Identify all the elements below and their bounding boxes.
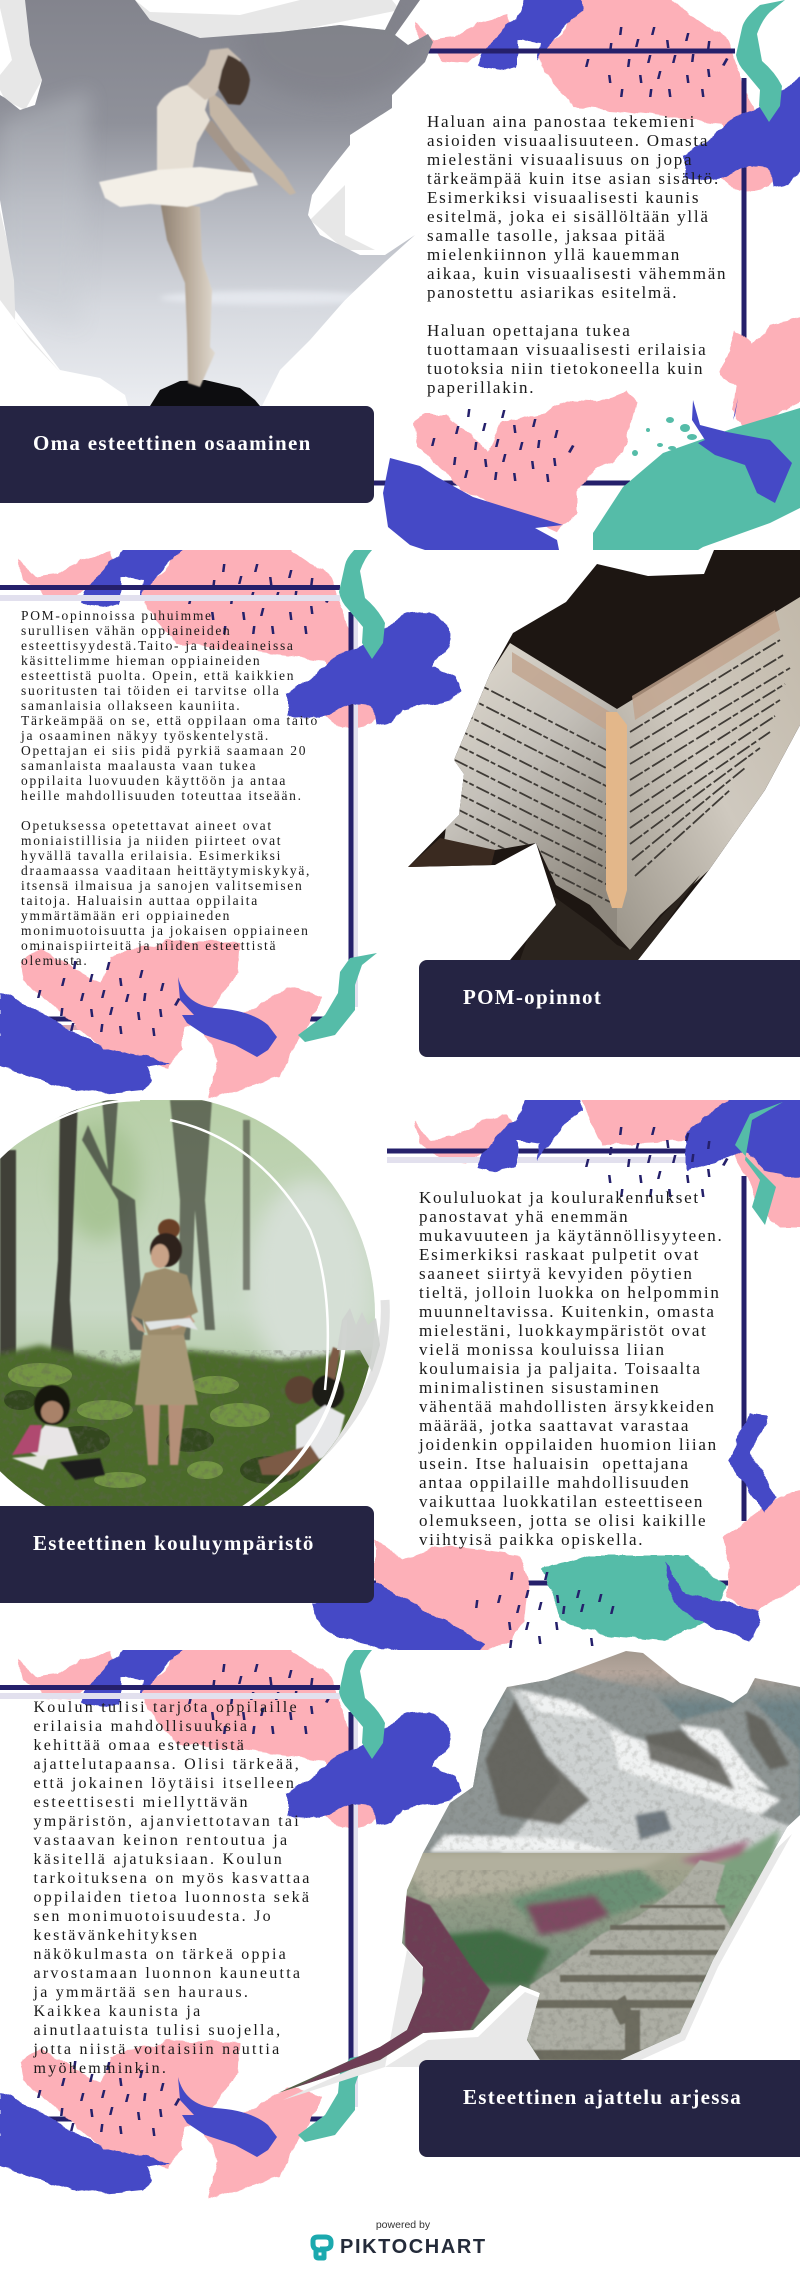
text: section 4 body: Kaikkea kaunista ja: [34, 2003, 202, 2020]
photo: old book: [400, 550, 800, 960]
text: section 4 body: esteettisesti miellyttävän: [34, 1794, 250, 1811]
dashes: [585, 1127, 728, 1197]
text: section 2 body: surullisen vähän oppiaineiden: [21, 623, 232, 638]
text: section 2 body: esteettisyydestä.Taito- ja taideaineissa: [21, 638, 295, 653]
stone steps: [527, 1860, 735, 2060]
ballerina figure: [99, 48, 296, 387]
text: section 1 body: Haluan aina panostaa tekemieni: [427, 112, 696, 131]
lower dashes: [475, 1572, 614, 1648]
face and neck: [187, 48, 241, 100]
photo: ballerina: [0, 0, 440, 410]
lower blue stroke: [383, 458, 563, 555]
heading: Esteettinen ajattelu arjessa: [419, 2060, 800, 2157]
text: section 4 body: [33, 1699, 312, 2077]
panel: section 3 decoration: [311, 1095, 800, 1655]
text: section 1 body: aikaa, kuin visuaalisesti vähemmän: [427, 264, 727, 283]
blue blob: [685, 74, 800, 188]
footer: powered by: powered by: [376, 2219, 430, 2231]
frame lines: [0, 1685, 354, 2122]
frame shadow: [387, 1157, 687, 1163]
heading: POM-opinnot: [419, 960, 800, 1057]
text: section 1 body: Esimerkiksi visuaalisesti kaunis: [427, 188, 700, 207]
lower dashes: [431, 409, 574, 482]
text: section 1 body: Haluan opettajana tukea: [427, 321, 632, 340]
blue blob: [288, 612, 462, 726]
text: section 3 body: määrää, jotka saattavat varastaa: [419, 1416, 690, 1435]
text: section 2 body: käsittelimme hieman oppiaineiden: [21, 653, 261, 668]
teal stroke: [736, 0, 785, 122]
text: section 3 body: muunneltavissa. Kuitenkin, omasta: [419, 1302, 716, 1321]
frame lines: [0, 585, 354, 1022]
lower binding: [520, 875, 700, 960]
lower pink: [375, 1540, 530, 1655]
text: section 3 body: usein. Itse haluaisin opettajana: [419, 1454, 690, 1473]
text: section 1 body: tärkeämpää kuin itse asian sisältö.: [427, 169, 720, 188]
text: section 4 body: sen monimuotoisuudesta. Jo: [34, 1908, 273, 1925]
text: section 4 body: jotta niistä voitaisiin nauttia: [34, 2041, 281, 2058]
meadow: [270, 1853, 800, 2103]
text: section 2 body: hyvällä tavalla erilaisia. Esimerkiksi: [21, 848, 282, 863]
text: section 1 body: samalle tasolle, jaksaa pitää: [427, 226, 667, 245]
mountain range: [400, 1668, 800, 1855]
text: section 3 body: antaa oppilaille mahdollisuuden: [419, 1473, 690, 1492]
text: section 2 body: taitoja. Haluaisin auttaa oppilaita: [21, 893, 259, 908]
bottom brush strokes: [0, 940, 377, 1100]
tree trunks: [0, 1100, 250, 1360]
seated boys: [258, 1347, 345, 1475]
large teal shape: [593, 405, 800, 555]
lower teal: [541, 1555, 725, 1641]
right page writing: [630, 640, 790, 876]
text: section 2 body: POM-opinnoissa puhuimme: [21, 608, 213, 623]
text: section 3 body: olemukseen, jotta se olisi kaikille: [419, 1511, 707, 1530]
foliage texture: [0, 1350, 380, 1510]
text: section 4 body: tarkoituksena on myös kasvattaa: [34, 1870, 312, 1887]
text: section 3 body: [418, 1188, 724, 1549]
text: section 1 body: panostettu asiarikas esitelmä.: [427, 283, 678, 302]
book spine: [606, 712, 627, 908]
rock: [150, 380, 260, 406]
near arm and hand: [208, 90, 296, 195]
text: section 3 body: panostavat yhä enemmän: [419, 1207, 629, 1226]
panel: section 1 decoration: [374, 0, 800, 555]
drop shadow: [283, 1834, 792, 2100]
text: section 3 body: koulumaisia ja paljaita. Toisaalta: [419, 1359, 702, 1378]
text: section 3 body: mielestäni, luokkaympäristöt ovat: [419, 1321, 708, 1340]
photo: forest classroom: [0, 1090, 385, 1530]
text: section 3 body: tieltä, jolloin luokka on helpommin: [419, 1283, 721, 1302]
footer: Piktochart wordmark: PIKTOCHART: [340, 2236, 487, 2258]
torso: [157, 83, 213, 172]
text: section 1 body: asioiden visuaalisuuteen. Omasta: [427, 131, 709, 150]
text: section 4 body: erilaisia mahdollisuuksia: [34, 1718, 249, 1735]
text: section 2 body: esteettistä puolta. Opein, että kaikkien: [21, 668, 295, 683]
text: section 3 body: vähentää mahdollisten ärsykkeiden: [419, 1397, 716, 1416]
text: section 1 body: mielenkiinnon yllä kauemman: [427, 245, 681, 264]
brush ring: [250, 1300, 385, 1510]
heading: Esteettinen kouluympäristö: Esteettinen kouluympäristö: [33, 1531, 315, 1555]
right pink: [724, 1488, 800, 1612]
text: section 1 body: mielestäni visuaalisuus on jopa: [427, 150, 693, 169]
right blue S-stroke: [727, 1414, 778, 1514]
text: section 4 body: ympäristön, ajanviettotavan tai: [34, 1813, 301, 1830]
leg: [160, 200, 215, 387]
top brush strokes: [18, 550, 376, 728]
text: section 4 body: käsitellä ajatuksiaan. Koulun: [34, 1851, 284, 1868]
text: section 4 body: arvostamaan luonnon kauneutta: [34, 1965, 302, 1982]
lower right pink: [720, 315, 800, 430]
teal stroke: [735, 1102, 783, 1225]
text: section 2 body: Tärkeämpää on se, että oppilaan oma taito: [21, 713, 319, 728]
text: section 2 body: Opetuksessa opetettavat aineet ovat: [21, 818, 273, 833]
lower blue: [311, 1562, 760, 1655]
top brush strokes: [18, 1650, 376, 1828]
teal stroke: [339, 550, 385, 659]
text: section 4 body: vastaavan keinon rentoutua ja: [34, 1832, 289, 1849]
paint strokes behind photo: [0, 0, 400, 372]
tutu: [99, 167, 258, 207]
text: section 2 body: oppilaita luovuuden käyttöön ja antaa: [21, 773, 287, 788]
teal stroke: [339, 1650, 385, 1759]
text: section 2 body: ja osaaminen näkyy työskentelystä.: [21, 728, 270, 743]
heading: Oma esteettinen osaaminen: [0, 406, 374, 503]
text: section 2 body: monimuotoisuutta ja jokaisen oppiaineen: [21, 923, 310, 938]
grass: [510, 1870, 670, 1930]
frame line shadows: [0, 1693, 358, 2107]
text: section 2 body: moniaistillisia ja niiden piirteet ovat: [21, 833, 282, 848]
text: section 1 body: esitelmä, joka ei sisällöltään yllä: [427, 207, 710, 226]
text: section 2 body: itsensä ilmaisua ja sanojen valitsemisen: [21, 878, 303, 893]
text: section 4 body: Koulun tulisi tarjota oppilaille: [34, 1699, 299, 1716]
text: section 2 body: suoritusten tai töiden ei tarvitse olla: [21, 683, 280, 698]
teal splatter: [632, 417, 697, 456]
panel: section 2 decoration: [0, 532, 462, 1100]
text: section 3 body: Koululuokat ja koulurakennukset: [419, 1188, 700, 1207]
top blue: [477, 1095, 800, 1180]
text: section 4 body: näkökulmasta on tärkeä oppia: [34, 1946, 288, 1963]
text: section 4 body: ja ymmärtää sen hauraus.: [34, 1984, 250, 2001]
heather: [525, 1895, 610, 1935]
meadow texture: [400, 1870, 800, 2060]
text: section 4 body: ajattelutapaansa. Olisi tärkeää,: [34, 1756, 301, 1773]
text: section 3 body: minimalistinen sisustaminen: [419, 1378, 660, 1397]
undergrowth: [0, 1345, 380, 1530]
text: section 1 body: tuottamaan visuaalisesti erilaisia: [427, 340, 707, 359]
footer logo icon: [313, 2237, 331, 2258]
text: section 4 body: kehittää omaa esteettistä: [34, 1737, 246, 1754]
top brush strokes: [415, 0, 790, 191]
text: section 2 body: Opettajan ei siis pidä pyrkiä saamaan 20: [21, 743, 307, 758]
text: section 4 body: kestävänkehityksen: [34, 1927, 199, 1944]
page ornament bands: [512, 610, 780, 730]
frame line shadows: [0, 595, 358, 1030]
text: section 3 body: joidenkin oppilaiden huomion liian: [419, 1435, 718, 1454]
heading: Esteettinen ajattelu arjessa: Esteettinen ajattelu arjessa: [463, 2085, 742, 2109]
text: section 1 body: paperillakin.: [427, 378, 535, 397]
bottom brush strokes: [0, 2040, 377, 2200]
teacher: [131, 1219, 198, 1465]
blue blob: [288, 1712, 462, 1826]
blue hair stroke: [692, 398, 792, 503]
text: section 4 body: ainutlaatuista tulisi suojella,: [34, 2022, 282, 2039]
text: section 3 body: vaikuttaa luokkatilan esteettiseen: [419, 1492, 704, 1511]
text: section 3 body: mukavuuteen ja käytännöllisyyteen.: [419, 1226, 724, 1245]
text: section 1 body: tuotoksia niin tietokoneella kuin: [427, 359, 704, 378]
text: section 3 body: viihtyisä paikka opiskella.: [419, 1530, 644, 1549]
top pink: [415, 1095, 800, 1227]
right page: [617, 597, 800, 950]
text: section 2 body: ominaispiirteitä ja niiden esteettistä: [21, 938, 277, 953]
pink flowers: [290, 1895, 490, 2090]
far arm: [203, 120, 252, 178]
seated girl: [12, 1385, 105, 1480]
text: section 2 body: samanlaisia ollakseen kauniita.: [21, 698, 241, 713]
text: section 3 body: saaneet siirtyä kevyiden pöytien: [419, 1264, 694, 1283]
text: section 2 body: samanlaista maalausta vaan tukea: [21, 758, 257, 773]
text: section 4 body: että jokainen löytäisi itselleen: [34, 1775, 296, 1792]
heading: POM-opinnot: POM-opinnot: [463, 985, 602, 1009]
text: section 2 body: ymmärtämään eri oppiaineden: [21, 908, 231, 923]
panel: section 4 decoration: [0, 1632, 462, 2200]
frame lines: [374, 1148, 746, 1586]
text: section 2 body: olemusta.: [21, 953, 88, 968]
photo: mountain path: [270, 1640, 800, 2103]
frame lines: [374, 48, 746, 486]
text: section 2 body: draamaassa vaaditaan heittäytymiskykyä,: [21, 863, 311, 878]
left page: [444, 643, 617, 936]
text: section 2 body: [20, 608, 319, 968]
text: section 2 body: heille mahdollisuuden toteuttaa itseään.: [21, 788, 303, 803]
text: section 1 body: [427, 112, 727, 397]
mountain texture: [400, 1670, 800, 1850]
left page writing: [455, 680, 610, 902]
heading: Oma esteettinen osaaminen: Oma esteettinen osaaminen: [33, 431, 312, 455]
lower pink blob: [413, 390, 637, 533]
text: section 3 body: Esimerkiksi raskaat pulpetit ovat: [419, 1245, 700, 1264]
grey brush lobes: [337, 1308, 380, 1372]
heading: Esteettinen kouluympäristö: [0, 1506, 374, 1603]
inner brush ring: [0, 1100, 345, 1510]
text: section 4 body: myöhemminkin.: [34, 2060, 168, 2077]
text: section 3 body: vielä monissa kouluissa liian: [419, 1340, 666, 1359]
text: section 4 body: oppilaiden tietoa luonnosta sekä: [34, 1889, 311, 1906]
hair: [218, 55, 250, 105]
